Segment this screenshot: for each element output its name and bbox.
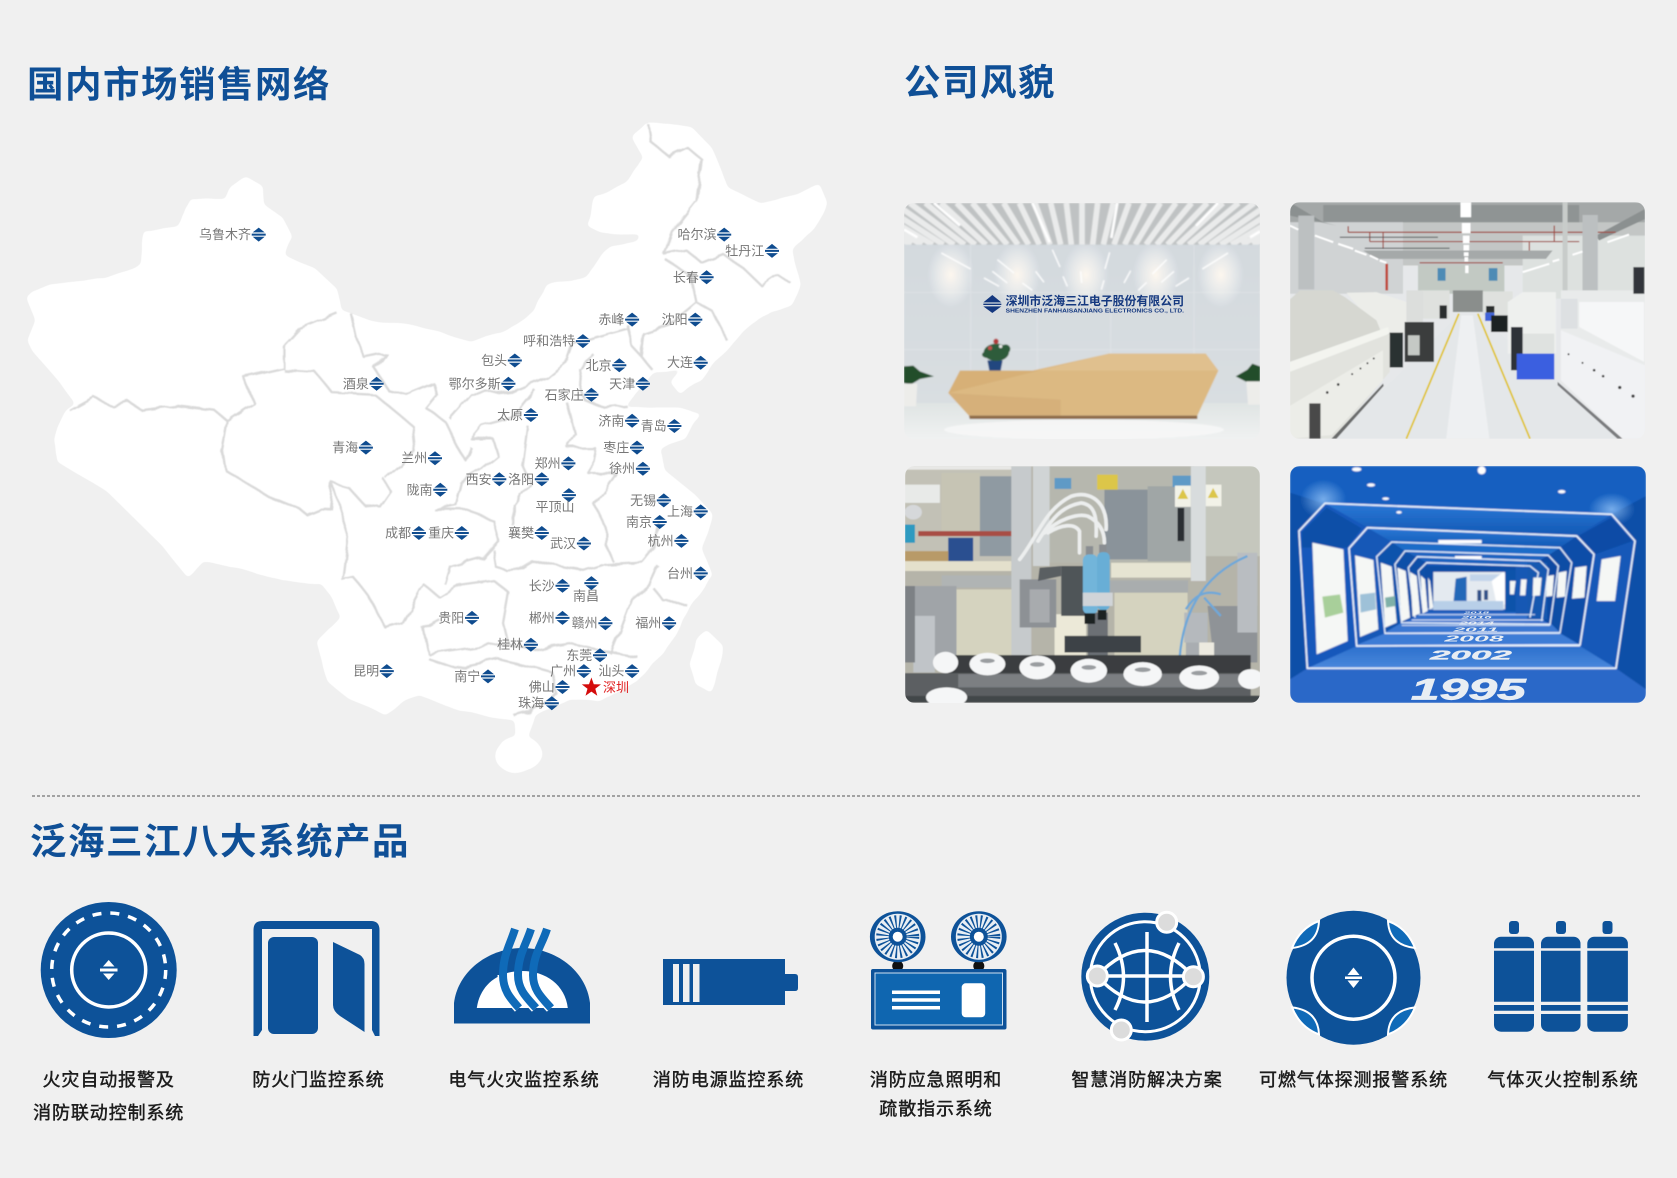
city: 鄂尔多斯: 鄂尔多斯 [449,376,501,391]
city: 大连: 大连 [667,355,693,370]
city: 长沙 [529,578,570,593]
city: 南昌 [573,576,599,604]
city: 贵阳: 贵阳 [438,610,464,625]
city: 贵阳 [438,610,479,625]
city: 太原 [497,408,538,422]
city: 南京 [626,514,667,530]
city: 平顶山 [535,488,576,514]
city: 酒泉 [343,376,384,391]
city: 太原: 太原 [497,408,523,422]
city: 珠海: 珠海 [518,696,544,711]
city: 南宁 [454,669,495,684]
city: 广州: 广州 [550,664,576,679]
icon: gas detector [1286,911,1420,1045]
city: 成都 [385,526,426,540]
city: 郑州: 郑州 [535,456,561,471]
city: 上海 [667,504,708,519]
city: 西安 [466,472,506,487]
city: 襄樊: 襄樊 [508,526,534,540]
city: 牡丹江: 牡丹江 [725,243,764,258]
icon: fire alarm detector [41,902,177,1038]
city: 昆明 [353,664,394,679]
icon: emergency lamp [870,911,1007,1030]
city: 武汉: 武汉 [550,536,576,551]
city: 襄樊 [508,526,549,540]
city: 广州 [550,664,591,679]
city: 天津: 天津 [609,376,635,391]
city: 佛山: 佛山 [529,680,555,694]
timeline years on floor: 1995 [1411,674,1528,707]
label: 智慧消防解决方案 [1071,1070,1223,1090]
city: 郑州 [535,456,575,471]
product: combustible gas [1259,911,1448,1090]
city: 赤峰 [598,312,639,327]
label: 气体灭火控制系统 [1487,1070,1639,1090]
city: 东莞 [566,648,607,663]
city: 徐州 [609,461,650,476]
product: gas extinguishing [1487,921,1639,1090]
city: 南宁: 南宁 [454,669,480,684]
city: 陇南: 陇南 [407,482,433,497]
city: 兰州 [401,451,442,466]
icon: gas cylinders [1490,921,1632,1032]
city: 佛山 [529,680,570,694]
city: 青海: 青海 [332,440,358,455]
city: 枣庄 [603,440,644,455]
city: 赣州: 赣州 [572,616,598,631]
city: 桂林: 桂林 [497,637,523,652]
city: 青岛 [641,418,681,434]
city: 郴州: 郴州 [529,610,555,625]
icon: globe network [1081,912,1209,1041]
logo on wall [983,294,1184,314]
city: 乌鲁木齐: 乌鲁木齐 [199,227,251,242]
city: 枣庄: 枣庄 [603,440,629,455]
city: 重庆: 重庆 [428,526,454,540]
heading: company style: 公司风貌 [904,62,1056,103]
timeline years on floor: 2008 [1441,634,1506,643]
city: 福州: 福州 [635,616,661,631]
map: China sales network [27,124,826,774]
city: 珠海 [518,696,559,711]
city: 洛阳: 洛阳 [508,472,534,487]
city: 无锡: 无锡 [630,493,656,508]
city: 台州 [667,566,708,581]
logo on wall: 深圳市泛海三江电子股份有限公司 [1006,293,1184,308]
city: 石家庄: 石家庄 [545,387,584,402]
city: 桂林 [497,637,538,652]
city: 大连 [667,355,708,370]
city: 上海: 上海 [667,504,693,519]
product: fire power supply [653,959,804,1090]
city: 福州 [635,616,676,631]
city: 徐州: 徐州 [609,461,635,476]
photo: reception lobby [904,203,1260,421]
product: smart fire protection [1071,912,1223,1090]
city: 南昌: 南昌 [573,588,599,604]
timeline years on floor: 2002 [1427,649,1512,663]
city: 赤峰: 赤峰 [598,312,624,327]
timeline years on floor: 2014 [1456,620,1496,625]
timeline years on floor: 2018 [1460,611,1491,615]
label: 消防联动控制系统 [33,1103,184,1123]
city: 昆明: 昆明 [353,664,379,679]
label: 火灾自动报警及 [43,1070,175,1090]
city: 洛阳 [508,472,549,487]
city: 长春: 长春 [673,270,699,285]
city: 包头 [481,353,522,368]
city: 长沙: 长沙 [529,578,555,593]
city: 济南 [598,413,639,428]
icon: electrical fire wires [454,929,590,1024]
city: 杭州 [648,533,688,548]
city: 青海 [332,440,373,455]
product: emergency lighting [870,911,1007,1119]
city: 北京: 北京 [586,358,612,373]
icon: fire door [254,921,380,1036]
city: 成都: 成都 [385,526,411,540]
map shape: China provinces [27,124,826,774]
city: 呼和浩特: 呼和浩特 [523,334,575,349]
photo: blue history corridor [1290,466,1646,707]
label: 电气火灾监控系统 [448,1070,600,1090]
label: 消防应急照明和 [870,1070,1002,1090]
timeline years on floor [1411,611,1528,707]
timeline years on floor: 2011 [1450,627,1498,633]
city: 深圳 headquarters star: 深圳 [603,680,629,695]
city: 沈阳: 沈阳 [662,312,688,327]
timeline years on floor: 2016 [1458,616,1492,620]
city: 南京: 南京 [626,514,652,530]
label: 可燃气体探测报警系统 [1259,1070,1448,1090]
product: fire door [252,921,385,1090]
city: 无锡 [630,493,671,508]
label: 疏散指示系统 [879,1099,993,1119]
heading: domestic sales network: 国内市场销售网络 [27,64,331,105]
city: 深圳 headquarters star [582,678,629,696]
city: 哈尔滨: 哈尔滨 [677,227,716,242]
city: 汕头 [598,664,639,679]
city: 郴州 [529,610,570,625]
city: 济南: 济南 [598,413,624,428]
logo on wall: SHENZHEN FANHAISANJIANG ELECTRONICS CO., LTD. [1006,309,1184,315]
city: 汕头: 汕头 [598,664,624,679]
city: 武汉 [550,536,591,551]
city: 杭州: 杭州 [648,533,674,548]
city: 北京 [586,358,626,373]
city: 平顶山: 平顶山 [535,500,575,514]
city: 重庆 [428,526,469,540]
photo: production line [1290,202,1645,439]
city: 赣州 [572,616,612,631]
label: 消防电源监控系统 [653,1070,804,1090]
city: 包头: 包头 [481,353,507,368]
city: 西安: 西安 [466,472,492,487]
city: 长春 [673,270,714,285]
city: 东莞: 东莞 [566,648,592,663]
city: 沈阳 [662,312,702,327]
city: 台州: 台州 [667,566,693,581]
product: electrical fire [448,929,600,1090]
label: 防火门监控系统 [252,1070,385,1090]
city: 陇南 [407,482,447,497]
photo: automated assembly machine [905,466,1263,707]
city: 酒泉: 酒泉 [343,376,369,391]
city: 天津 [609,376,650,391]
city: 青岛: 青岛 [641,418,667,434]
icon: battery [663,959,798,1005]
heading: eight system products: 泛海三江八大系统产品 [30,821,410,862]
city: 兰州: 兰州 [401,451,427,466]
product: fire alarm [33,902,184,1123]
